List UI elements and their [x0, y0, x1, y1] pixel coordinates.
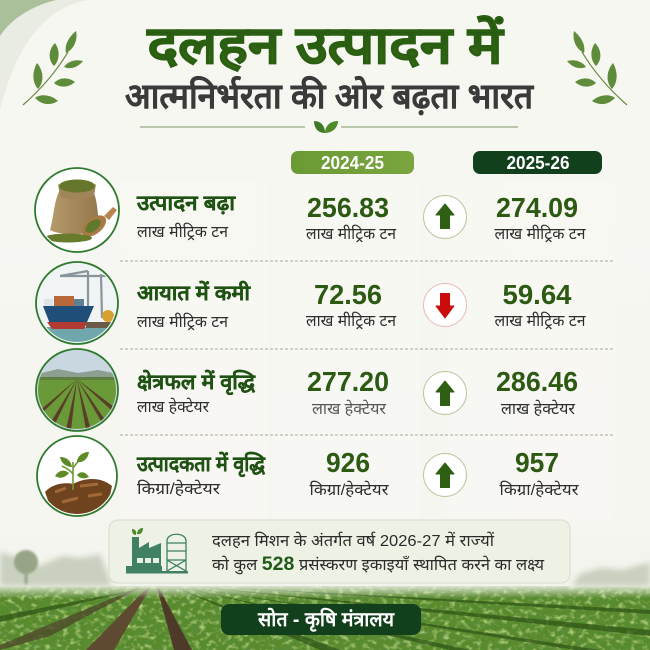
icon: seedling in soil [37, 436, 117, 516]
column header: 2025-26 [473, 151, 602, 174]
label: area: क्षेत्रफल में वृद्धि [137, 369, 256, 396]
arrow: up [424, 454, 466, 496]
row: production [35, 168, 587, 252]
decorative corner swoosh [0, 0, 88, 110]
subtitle: आत्मनिर्भरता की ओर बढ़ता भारत [125, 76, 534, 116]
source badge: सोत - कृषि मंत्रालय [257, 607, 395, 632]
value: imports 2024-25 [306, 279, 397, 330]
title: दलहन उत्पादन में [146, 15, 505, 75]
unit: production: लाख मीट्रिक टन [137, 222, 229, 241]
background: crop field [0, 584, 650, 650]
value: imports 2025-26 [494, 279, 587, 330]
value: imports 2024-25: लाख मीट्रिक टन [306, 311, 397, 330]
value: productivity 2024-25: किग्रा/हेक्टेयर [310, 480, 389, 499]
title divider with leaf ornament [140, 121, 518, 133]
value: production 2025-26 [494, 192, 587, 243]
icon: left laurel branch [23, 31, 83, 105]
value: productivity 2025-26: 957 [515, 447, 559, 478]
label: production: उत्पादन बढ़ा [136, 192, 237, 215]
callout: processing units target [109, 520, 570, 583]
panel: comparison table columns [120, 180, 615, 520]
value: production 2024-25: लाख मीट्रिक टन [306, 224, 397, 243]
arrow: up [424, 196, 466, 238]
value: area 2024-25: 277.20 [307, 366, 389, 397]
column header: 2024-25 [291, 151, 414, 174]
value: area 2025-26: 286.46 [496, 366, 578, 397]
value: imports 2024-25: 72.56 [314, 279, 382, 310]
value: imports 2025-26: 59.64 [502, 279, 572, 310]
column header: 2024-25: 2024-25 [321, 153, 384, 173]
value: productivity 2025-26 [500, 447, 579, 499]
value: productivity 2025-26: किग्रा/हेक्टेयर [500, 480, 579, 499]
value: production 2025-26: 274.09 [496, 192, 578, 223]
value: area 2025-26 [496, 366, 578, 418]
value: area 2024-25 [307, 366, 389, 418]
value: productivity 2024-25 [310, 447, 389, 499]
icon: cargo ship at port [36, 262, 118, 345]
icon: sack of pulses [35, 168, 119, 252]
icon: factory and silo [126, 528, 188, 574]
value: imports 2025-26: लाख मीट्रिक टन [494, 311, 587, 330]
background: misty tree line [0, 550, 650, 586]
callout text line 1: दलहन मिशन के अंतर्गत वर्ष 2026-27 में राज्यों [212, 531, 495, 550]
value: production 2024-25: 256.83 [307, 192, 389, 223]
row: area [36, 349, 578, 431]
unit: area: लाख हेक्टेयर [137, 397, 209, 416]
arrow: down [424, 284, 466, 326]
value: area 2025-26: लाख हेक्टेयर [501, 399, 575, 418]
icon: field landscape [36, 349, 118, 431]
value: productivity 2024-25: 926 [326, 447, 370, 478]
label: imports: आयात में कमी [137, 280, 252, 305]
value: area 2024-25: लाख हेक्टेयर [312, 399, 386, 418]
icon: right laurel branch [567, 31, 627, 105]
callout text line 2: को कुल 528 प्रसंस्करण इकाइयाँ स्थापित करने का लक्ष्य [212, 554, 545, 575]
label: productivity: उत्पादकता में वृद्धि [136, 451, 266, 478]
arrow: up [424, 372, 466, 414]
row: imports [36, 262, 587, 345]
unit: imports: लाख मीट्रिक टन [137, 312, 229, 331]
column header: 2025-26: 2025-26 [506, 153, 570, 173]
unit: productivity: किग्रा/हेक्टेयर [137, 479, 220, 498]
row: productivity [37, 436, 579, 516]
source badge [221, 604, 421, 635]
value: production 2025-26: लाख मीट्रिक टन [494, 224, 587, 243]
value: production 2024-25 [306, 192, 397, 243]
